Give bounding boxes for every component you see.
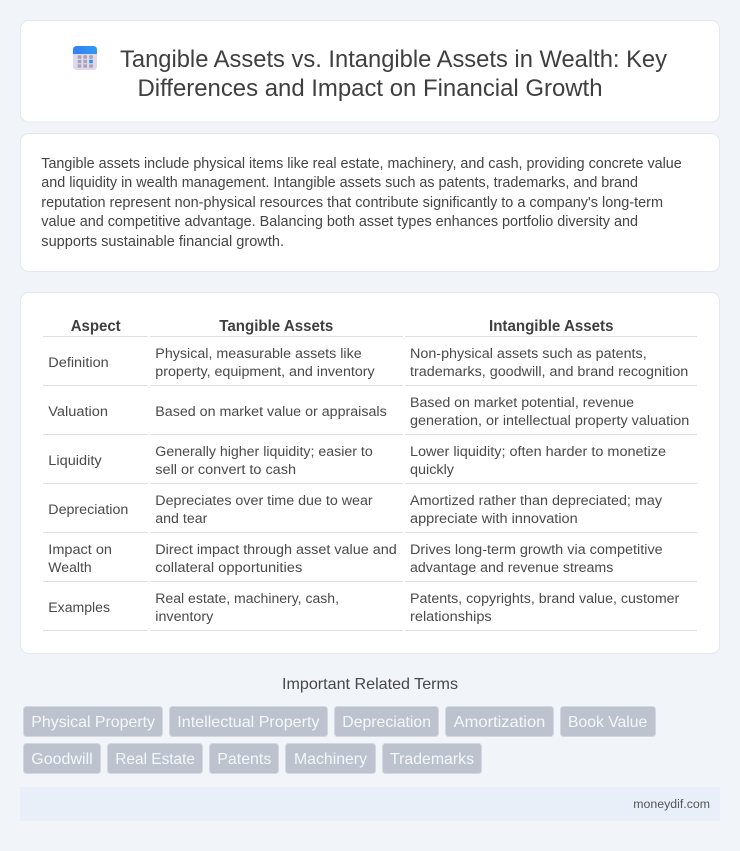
table row: definition: trademarks, goodwill, and brand recognition bbox=[410, 364, 688, 380]
table row: valuation: Based on market value or appraisals bbox=[155, 404, 387, 420]
table row: valuation: Valuation bbox=[48, 404, 108, 420]
table row: definition bbox=[43, 346, 697, 386]
tag: trademarks: Trademarks bbox=[390, 751, 474, 768]
title: Tangible Assets vs. Intangible Assets in Wealth: Key bbox=[120, 46, 667, 73]
table row: examples: Patents, copyrights, brand value, customer bbox=[410, 591, 680, 607]
tag: physical property bbox=[24, 706, 162, 736]
tag: real estate bbox=[108, 744, 202, 774]
tag: physical property: Physical Property bbox=[31, 714, 155, 731]
tag: real estate: Real Estate bbox=[115, 751, 195, 768]
text block: introduction paragraph: Tangible assets include physical items like real estate, machinery, and cash, providing concrete value bbox=[41, 156, 682, 172]
table row: definition: Definition bbox=[48, 355, 109, 371]
heading: important related terms: Important Related Terms bbox=[282, 676, 458, 693]
tag: goodwill bbox=[24, 744, 100, 774]
table row: impact on wealth bbox=[43, 542, 697, 582]
icon: calendar bbox=[73, 46, 97, 70]
tag: book value bbox=[560, 706, 656, 736]
table row: depreciation bbox=[43, 493, 697, 532]
panel: comparison table bbox=[20, 292, 720, 654]
text block: introduction paragraph: value and competitive advantage. Balancing both asset types enhances portfolio diversity and bbox=[41, 214, 638, 230]
table row: impact on wealth: Wealth bbox=[48, 560, 92, 576]
tag: depreciation bbox=[334, 706, 438, 736]
footer bbox=[20, 787, 720, 821]
table row: depreciation: Depreciates over time due to wear bbox=[155, 493, 373, 509]
table row: liquidity: Liquidity bbox=[48, 453, 103, 469]
table row: depreciation: Amortized rather than depreciated; may bbox=[410, 493, 663, 509]
table header: Aspect bbox=[71, 318, 121, 335]
table row: depreciation: and tear bbox=[155, 511, 208, 527]
tag: intellectual property: Intellectual Property bbox=[177, 714, 320, 731]
tag: amortization: Amortization bbox=[454, 714, 545, 731]
table row: impact on wealth: Drives long-term growth via competitive bbox=[410, 542, 663, 558]
table row: examples bbox=[43, 591, 697, 630]
text block: introduction paragraph: reputation represent non-physical resources that contribute significantly to a company's long-term bbox=[41, 195, 663, 211]
table row: impact on wealth: Direct impact through asset value and bbox=[155, 542, 397, 558]
text block: introduction paragraph: and liquidity in wealth management. Intangible assets such as patents, trademarks, and brand bbox=[41, 175, 638, 191]
text block: introduction paragraph bbox=[41, 156, 682, 250]
table row: valuation: generation, or intellectual property valuation bbox=[410, 413, 689, 429]
table row: definition: Physical, measurable assets like bbox=[155, 346, 362, 362]
text block: introduction paragraph: supports sustainable financial growth. bbox=[41, 234, 284, 250]
panel: introduction bbox=[20, 134, 720, 272]
table row: liquidity: quickly bbox=[410, 462, 455, 478]
title: Differences and Impact on Financial Growth bbox=[138, 75, 602, 102]
tag: book value: Book Value bbox=[568, 714, 647, 731]
tag: depreciation: Depreciation bbox=[342, 714, 431, 731]
table row: valuation: Based on market potential, revenue bbox=[410, 395, 634, 411]
table header: Intangible Assets bbox=[489, 318, 614, 335]
table row: liquidity: Lower liquidity; often harder to monetize bbox=[410, 444, 666, 460]
table row: examples: Real estate, machinery, cash, bbox=[155, 591, 339, 607]
table row: liquidity bbox=[43, 444, 697, 484]
table row: examples: Examples bbox=[48, 600, 110, 616]
tag: trademarks bbox=[382, 744, 482, 774]
table header: Tangible Assets bbox=[219, 318, 333, 335]
footer: moneydif.com bbox=[633, 797, 710, 811]
table row: liquidity: Generally higher liquidity; easier to bbox=[155, 444, 373, 460]
tag: machinery: Machinery bbox=[294, 751, 367, 768]
table row: definition: property, equipment, and inventory bbox=[155, 364, 376, 380]
table row: impact on wealth: advantage and revenue streams bbox=[410, 560, 613, 576]
tag: intellectual property bbox=[170, 706, 328, 736]
tag: patents bbox=[210, 744, 278, 774]
tag: amortization bbox=[446, 706, 554, 736]
table row: examples: relationships bbox=[410, 609, 492, 625]
table row: depreciation: Depreciation bbox=[48, 502, 128, 518]
table row: liquidity: sell or convert to cash bbox=[155, 462, 296, 478]
tag: machinery bbox=[286, 744, 376, 774]
tag: patents: Patents bbox=[217, 751, 271, 768]
table header bbox=[43, 318, 697, 336]
table row: impact on wealth: Impact on bbox=[48, 542, 112, 558]
table row: valuation bbox=[43, 395, 697, 434]
table row: definition: Non-physical assets such as patents, bbox=[410, 346, 647, 362]
table row: depreciation: appreciate with innovation bbox=[410, 511, 578, 527]
tag group: related terms bbox=[24, 706, 656, 774]
tag: goodwill: Goodwill bbox=[31, 751, 93, 768]
panel: header bbox=[20, 20, 720, 122]
title bbox=[120, 46, 667, 102]
table row: impact on wealth: collateral opportunities bbox=[155, 560, 302, 576]
table row: examples: inventory bbox=[155, 609, 214, 625]
